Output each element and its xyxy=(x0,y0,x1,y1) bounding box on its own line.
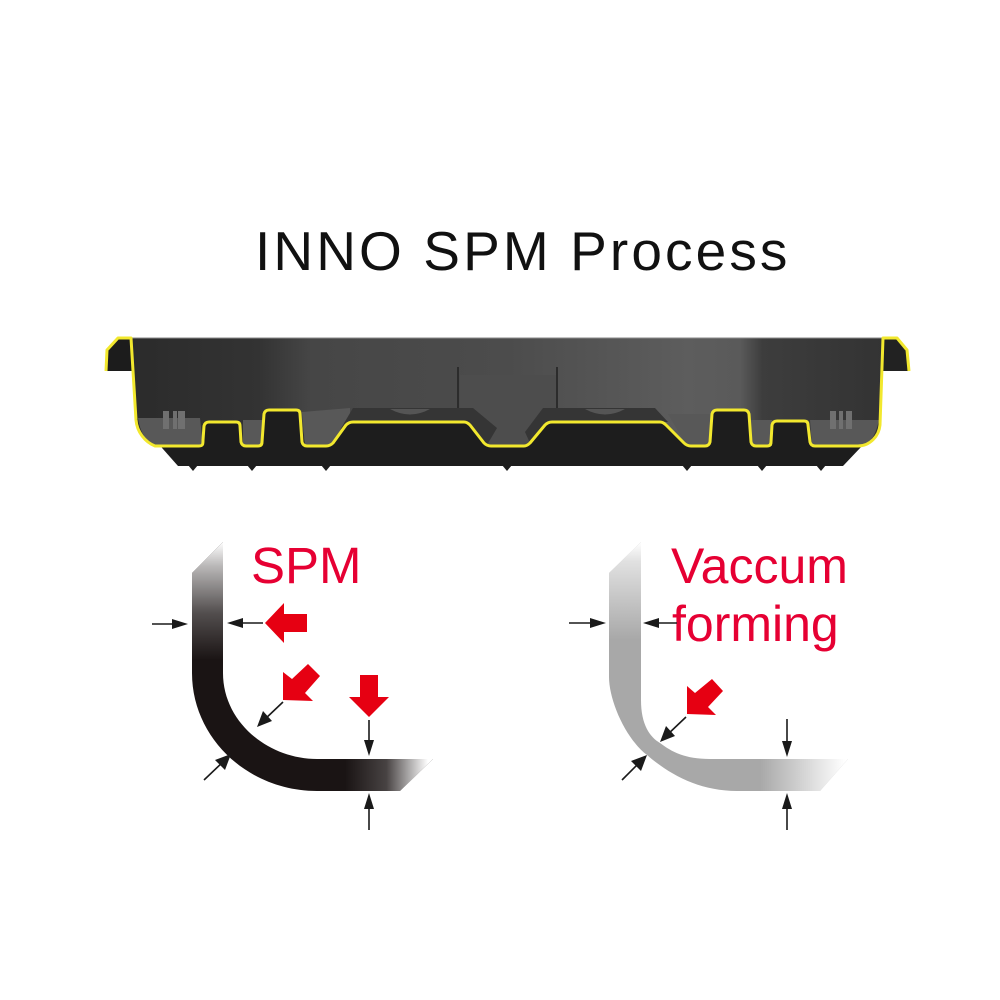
panel: Vacuum forming xyxy=(569,530,860,830)
left boss hole xyxy=(390,409,430,414)
left ribs xyxy=(163,411,185,429)
left flange xyxy=(106,338,135,371)
SPM label: SPM xyxy=(251,537,362,594)
yellow profile line xyxy=(106,338,909,446)
left boss xyxy=(340,408,497,445)
title: INNO SPM Process xyxy=(255,220,791,282)
red pressure arrow: bottom xyxy=(349,675,389,717)
tray underside xyxy=(155,400,862,466)
thickness arrows xyxy=(569,618,792,830)
red pressure arrow: corner xyxy=(687,679,723,715)
right flange xyxy=(883,338,909,371)
tray support feet xyxy=(188,465,826,471)
right boss xyxy=(525,408,668,443)
Vaccum forming label: forming xyxy=(672,596,839,652)
right boss hole xyxy=(585,409,625,414)
centre raised panel xyxy=(460,375,557,446)
top edge xyxy=(131,337,883,339)
tray cross-section xyxy=(106,338,909,471)
panel: SPM xyxy=(152,530,440,830)
thickness arrows xyxy=(152,618,374,830)
right ribs xyxy=(830,411,852,429)
panel edges xyxy=(458,367,557,408)
lower wall shading xyxy=(138,408,879,446)
red pressure arrow: corner xyxy=(283,664,320,701)
red pressure arrow: side xyxy=(265,603,307,643)
tray inner wall xyxy=(131,338,883,446)
thin grey wall profile xyxy=(609,542,848,791)
thick dark wall profile xyxy=(192,542,433,791)
Vaccum forming label: Vaccum xyxy=(671,538,848,594)
